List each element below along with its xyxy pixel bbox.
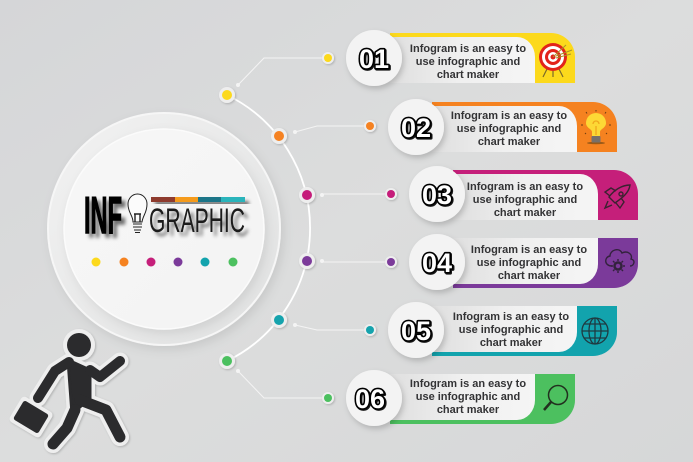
text 06: use infographic and (416, 391, 520, 403)
text 02: use infographic and (457, 123, 561, 135)
arc nodes (219, 87, 315, 369)
logo: infographic: INF (84, 187, 122, 245)
number badge 01: 01 (359, 44, 389, 74)
text 02: Infogram is an easy to (451, 110, 567, 122)
icon: target (539, 43, 572, 77)
timeline arc (227, 95, 310, 361)
figure outline (8, 329, 120, 444)
text 02: chart maker (478, 136, 541, 148)
text 05: use infographic and (459, 324, 563, 336)
text 06: Infogram is an easy to (410, 378, 526, 390)
number badge 03: 03 (422, 180, 452, 210)
number badge 03 (409, 166, 465, 222)
icon: running businessman (8, 329, 120, 444)
icon: light bulb (581, 110, 611, 144)
connector lines (236, 58, 391, 398)
logo bulb icon (128, 194, 147, 232)
icon: rocket (605, 185, 630, 208)
outer ring (48, 113, 280, 345)
central circle badge (48, 113, 280, 345)
card 06 (346, 370, 575, 426)
text 03: Infogram is an easy to (467, 181, 583, 193)
logo: infographic (84, 187, 245, 245)
icon: globe (582, 318, 608, 344)
card 02 (388, 99, 617, 155)
number badge 06 (346, 370, 402, 426)
icon: magnifier (544, 386, 568, 410)
number badge 02 (388, 99, 444, 155)
number badge 04: 04 (422, 248, 452, 278)
text 05: chart maker (480, 337, 543, 349)
number badge 05 (388, 302, 444, 358)
text 05: Infogram is an easy to (453, 311, 569, 323)
connector end dots (322, 52, 397, 404)
text 06: chart maker (437, 404, 500, 416)
text 01: use infographic and (416, 56, 520, 68)
number badge 02: 02 (401, 113, 431, 143)
card 04 (409, 234, 638, 290)
card 05 (388, 302, 617, 358)
text 04: use infographic and (477, 257, 581, 269)
figure body (13, 333, 120, 444)
number badge 05: 05 (401, 316, 431, 346)
card 01 (346, 30, 575, 86)
text 04: Infogram is an easy to (471, 244, 587, 256)
logo word GRAPHIC: GRAPHIC (149, 202, 245, 240)
card 03 (409, 166, 638, 222)
colour dots row (92, 258, 238, 266)
text 01: chart maker (437, 69, 500, 81)
number badge 06: 06 (355, 384, 385, 414)
text 03: use infographic and (473, 194, 577, 206)
logo colour bars (151, 197, 245, 202)
text 03: chart maker (494, 207, 557, 219)
number badge 01 (346, 30, 402, 86)
number badge 04 (409, 234, 465, 290)
icon: cloud with gear (606, 250, 634, 273)
text 04: chart maker (498, 270, 561, 282)
inner disk (64, 129, 264, 329)
text 01: Infogram is an easy to (410, 43, 526, 55)
